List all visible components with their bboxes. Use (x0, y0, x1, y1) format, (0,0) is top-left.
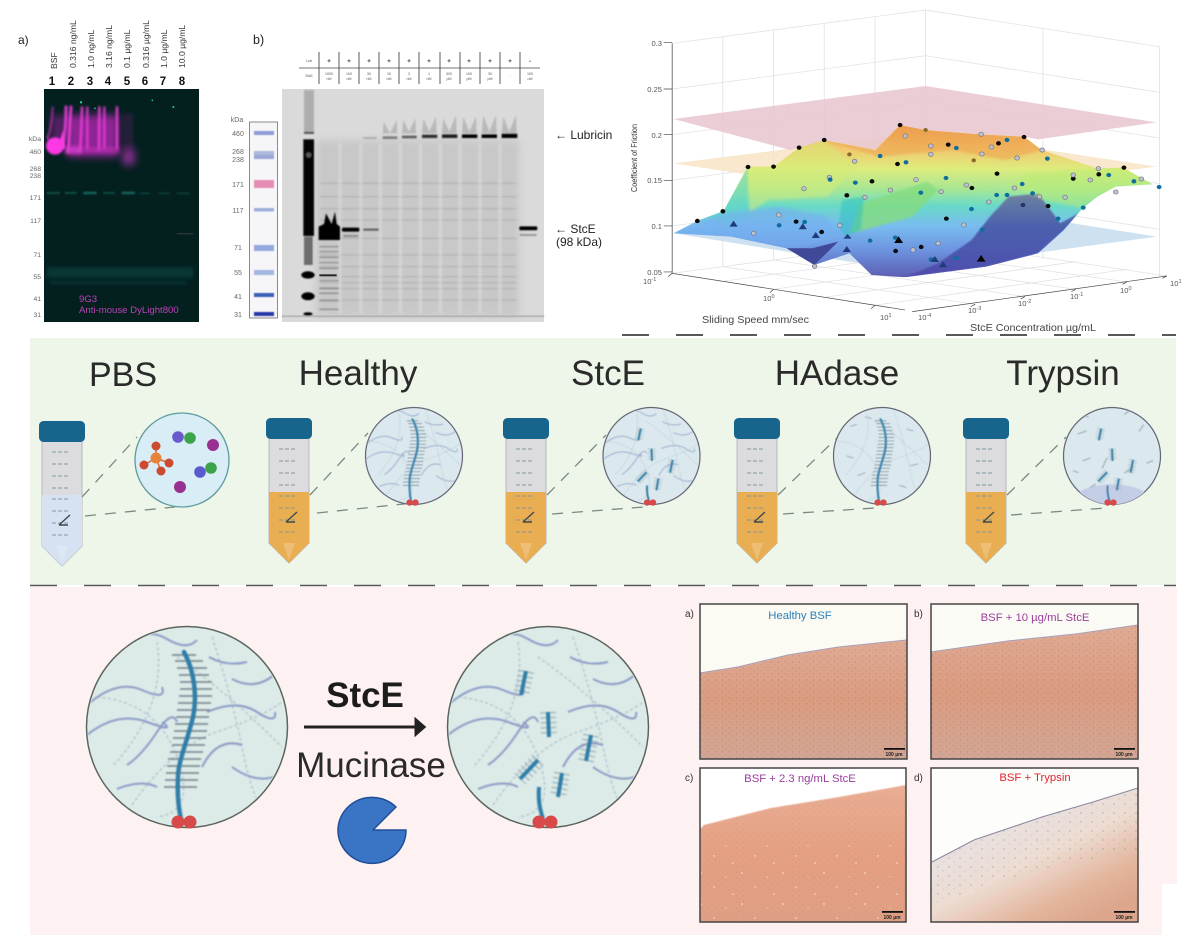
circle: healthy lubricin (365, 407, 463, 506)
lane header table: pM (488, 77, 492, 81)
kDa markers: 71 (33, 252, 41, 259)
gel kDa labels: kDa (231, 117, 243, 124)
lane concentration labels: 1.0 ng/mL (86, 30, 96, 68)
background panel: pink mucinase and histology (30, 587, 1177, 935)
x axis tick labels: 1 (888, 313, 892, 319)
lane numbers: 6 (142, 76, 148, 88)
y axis tick labels: 0.2 (651, 131, 662, 140)
lane numbers: 2 (68, 76, 74, 88)
lane header table: + (508, 58, 512, 65)
axis lines and ticks (664, 43, 1167, 312)
panel b: protein gel (231, 33, 612, 322)
mucinase reaction label (296, 676, 446, 863)
blot image (44, 89, 199, 322)
lane header table: - (509, 74, 511, 78)
scale bar d (1114, 911, 1135, 921)
lane header table: 30 (367, 72, 371, 76)
data markers (695, 123, 1161, 268)
icon: Trypsin tube (963, 418, 1009, 563)
kDa markers: 238 (30, 173, 41, 180)
heading: HAdase: HAdase (775, 354, 899, 393)
lane header table: pM (466, 77, 472, 81)
lane header table: 100 (527, 72, 533, 76)
lane numbers: 3 (87, 76, 93, 88)
protein ladder (250, 122, 278, 318)
histology panel b (914, 604, 1138, 759)
caption d: BSF + Trypsin (999, 772, 1071, 784)
x axis tick labels: -1 (651, 277, 656, 283)
x axis tick labels: 1 (1178, 279, 1182, 285)
zoom lines (82, 437, 175, 516)
caption c: BSF + 2.3 ng/mL StcE (744, 773, 856, 785)
lane numbers: 7 (160, 76, 166, 88)
gel kDa labels: 41 (234, 294, 242, 301)
histology panel a (685, 604, 907, 759)
x axis tick labels: 10 (880, 313, 888, 322)
label c: c) (685, 773, 693, 784)
gel kDa labels: 238 (232, 157, 244, 164)
lane header table: - (529, 58, 531, 65)
histology panel d (914, 768, 1138, 922)
icon: HAdase tube (734, 418, 780, 563)
y axis title: Coefficient of Friction (629, 124, 639, 192)
lane header table: nM (426, 77, 432, 81)
circle: trypsin digested lubricin (1063, 407, 1161, 508)
lane numbers: 8 (179, 76, 186, 88)
y axis tick labels: 0.25 (647, 85, 662, 94)
lane concentration labels: 3.16 ng/mL (104, 25, 114, 68)
lane header table: 3 (408, 72, 410, 76)
scale bar b: 100 µm (1115, 752, 1133, 758)
label d: d) (914, 773, 923, 784)
lane header table: + (447, 58, 451, 65)
group: Healthy (266, 354, 463, 563)
zoom lines (1007, 437, 1106, 515)
lane numbers: 4 (105, 76, 112, 88)
upper section divider (622, 334, 1176, 336)
x axis tick labels: 10 (643, 277, 651, 286)
lane concentration labels: BSF (49, 52, 59, 69)
heading: PBS: PBS (89, 356, 157, 394)
lane concentration labels (49, 20, 187, 69)
gel kDa labels (231, 117, 244, 319)
icon: PBS tube (39, 421, 85, 566)
y axis tick labels: 0.15 (647, 176, 662, 185)
image d (931, 768, 1138, 922)
lane header table: nM (386, 77, 392, 81)
x axis tick labels: -2 (1026, 299, 1031, 305)
lane header table: nM (326, 77, 332, 81)
histology panel c (685, 768, 906, 922)
lane header table: + (347, 58, 351, 65)
x axis tick labels: 10 (1018, 299, 1026, 308)
lane header table: 10 (387, 72, 391, 76)
StcE concentration axis title: StcE Concentration µg/mL (970, 322, 1096, 334)
lane header table: 1 (428, 72, 430, 76)
kDa markers: 55 (33, 274, 41, 281)
lane header table: StcE (305, 74, 313, 78)
lane header table: + (427, 58, 431, 65)
icon: mucinase enzyme (338, 797, 406, 863)
3D friction surface chart (629, 10, 1182, 334)
kDa markers (29, 136, 41, 319)
x axis tick labels: 10 (1170, 279, 1178, 288)
kDa markers: 117 (30, 218, 41, 225)
circle: StcE cleaved lubricin (602, 407, 700, 506)
lane concentration labels: 0.1 µg/mL (122, 29, 132, 68)
group: Trypsin (963, 354, 1161, 563)
annotation: StcE: (98 kDa) (556, 235, 602, 249)
lane header table: + (488, 58, 492, 65)
StcE label: StcE (326, 676, 404, 715)
y axis tick labels: 0.1 (651, 222, 662, 231)
annotation: StcE: ← StcE (555, 222, 596, 236)
x axis tick labels: -3 (976, 306, 981, 312)
annotation: lubricin: ← Lubricin (555, 128, 612, 142)
x axis tick labels (643, 277, 1182, 322)
x axis tick labels: 10 (1070, 292, 1078, 301)
circle: HAdase treated lubricin (833, 407, 931, 506)
group: PBS (39, 356, 229, 566)
friction surface (674, 126, 1152, 278)
x axis tick labels: -4 (926, 313, 931, 319)
caption a: Healthy BSF (768, 610, 832, 622)
heading: StcE: StcE (571, 354, 645, 393)
scale bar a: 100 µm (885, 752, 903, 758)
label b: b) (914, 609, 923, 620)
lubricin bands (363, 115, 517, 139)
lane concentration labels: 0.316 µg/mL (141, 20, 151, 68)
lane header table: + (387, 58, 391, 65)
kDa markers: 171 (30, 195, 41, 202)
scale bar a (884, 748, 905, 758)
gel kDa labels: 460 (232, 131, 244, 138)
lane numbers: 5 (124, 76, 131, 88)
lane header table: 300 (446, 72, 452, 76)
gel kDa labels: 268 (232, 149, 244, 156)
lane header table: nM (528, 77, 532, 81)
image c (700, 768, 906, 922)
x axis tick labels: 0 (1128, 286, 1132, 292)
kDa markers: 41 (33, 296, 41, 303)
middle section divider (30, 584, 1176, 586)
y axis tick labels: 0.3 (651, 39, 662, 48)
group: StcE (503, 354, 700, 563)
lane header table: + (467, 58, 471, 65)
x axis tick labels: 10 (968, 306, 976, 315)
y axis tick labels: 0.05 (647, 268, 662, 277)
image b (931, 604, 1138, 759)
icon: StcE tube (503, 418, 549, 563)
gel kDa labels: 71 (234, 245, 242, 252)
scale bar d: 100 µm (1115, 915, 1133, 921)
panel label b: b) (253, 33, 264, 47)
label a: a) (685, 609, 694, 620)
scale bar c: 100 µm (883, 915, 901, 921)
lane header table: 1000 (325, 72, 333, 76)
y axis tick labels (647, 39, 662, 277)
pink reference plane (674, 86, 1156, 150)
blue reference plane (674, 200, 1156, 271)
kDa markers: 31 (33, 312, 41, 319)
kDa markers: kDa (29, 136, 41, 143)
zoom lines (310, 433, 413, 513)
scale bar c (882, 911, 903, 921)
x axis tick labels: 10 (763, 294, 771, 303)
lane concentration labels: 10.0 µg/mL (177, 25, 187, 68)
heading: Healthy: Healthy (299, 354, 418, 393)
lane header table: nM (366, 77, 372, 81)
kDa markers: 460 (30, 149, 41, 156)
lane header table: 100 (466, 72, 472, 76)
lane header table: + (367, 58, 371, 65)
lane header table: nM (346, 77, 352, 81)
gel image (282, 89, 544, 322)
lane header table: 100 (346, 72, 352, 76)
lane header table: Lub (306, 59, 312, 63)
circle: buffer ions (135, 413, 229, 507)
gel kDa labels: 171 (232, 182, 244, 189)
image a (700, 604, 907, 759)
x axis tick labels: -1 (1078, 292, 1083, 298)
lane header table: nM (406, 77, 412, 81)
zoom lines (778, 437, 875, 514)
lane numbers: 1 (49, 76, 56, 88)
x axis tick labels: 0 (771, 294, 775, 300)
lane concentration labels: 1.0 µg/mL (159, 29, 169, 68)
gel kDa labels: 31 (234, 312, 242, 319)
group: HAdase (734, 354, 931, 563)
sliding speed axis title: Sliding Speed mm/sec (702, 314, 809, 326)
sample lane (301, 90, 315, 316)
caption b: BSF + 10 µg/mL StcE (981, 612, 1090, 624)
large circle: cleaved lubricin (448, 626, 648, 828)
heading: Trypsin: Trypsin (1006, 354, 1120, 393)
blot caption: 9G3 (79, 294, 97, 305)
x axis tick labels: 10 (918, 313, 926, 322)
lane header table: + (327, 58, 331, 65)
StcE bands (319, 212, 537, 240)
lane numbers (49, 76, 186, 88)
gel kDa labels: 55 (234, 270, 242, 277)
large circle: intact lubricin (86, 626, 288, 828)
zoom lines (547, 435, 644, 514)
kDa markers: 268 (30, 166, 41, 173)
Mucinase label: Mucinase (296, 746, 446, 785)
lane header table: 30 (488, 72, 492, 76)
lane header table (299, 52, 540, 84)
blot image: Anti-mouse DyLight800 (79, 305, 179, 316)
background panel: green tube comparison (30, 338, 1176, 585)
lane header table: pM (446, 77, 452, 81)
chart grid walls (672, 10, 1167, 305)
orange reference plane (674, 132, 1156, 198)
lane concentration labels: 0.316 ng/mL (68, 20, 78, 68)
panel label a: a) (18, 33, 29, 47)
icon: Healthy tube (266, 418, 312, 563)
panel a: fluorescent western blot (18, 20, 199, 322)
gel kDa labels: 117 (232, 208, 244, 215)
scale bar b (1114, 748, 1135, 758)
arrow (304, 720, 424, 734)
lane header table: + (407, 58, 411, 65)
x axis tick labels: 10 (1120, 286, 1128, 295)
